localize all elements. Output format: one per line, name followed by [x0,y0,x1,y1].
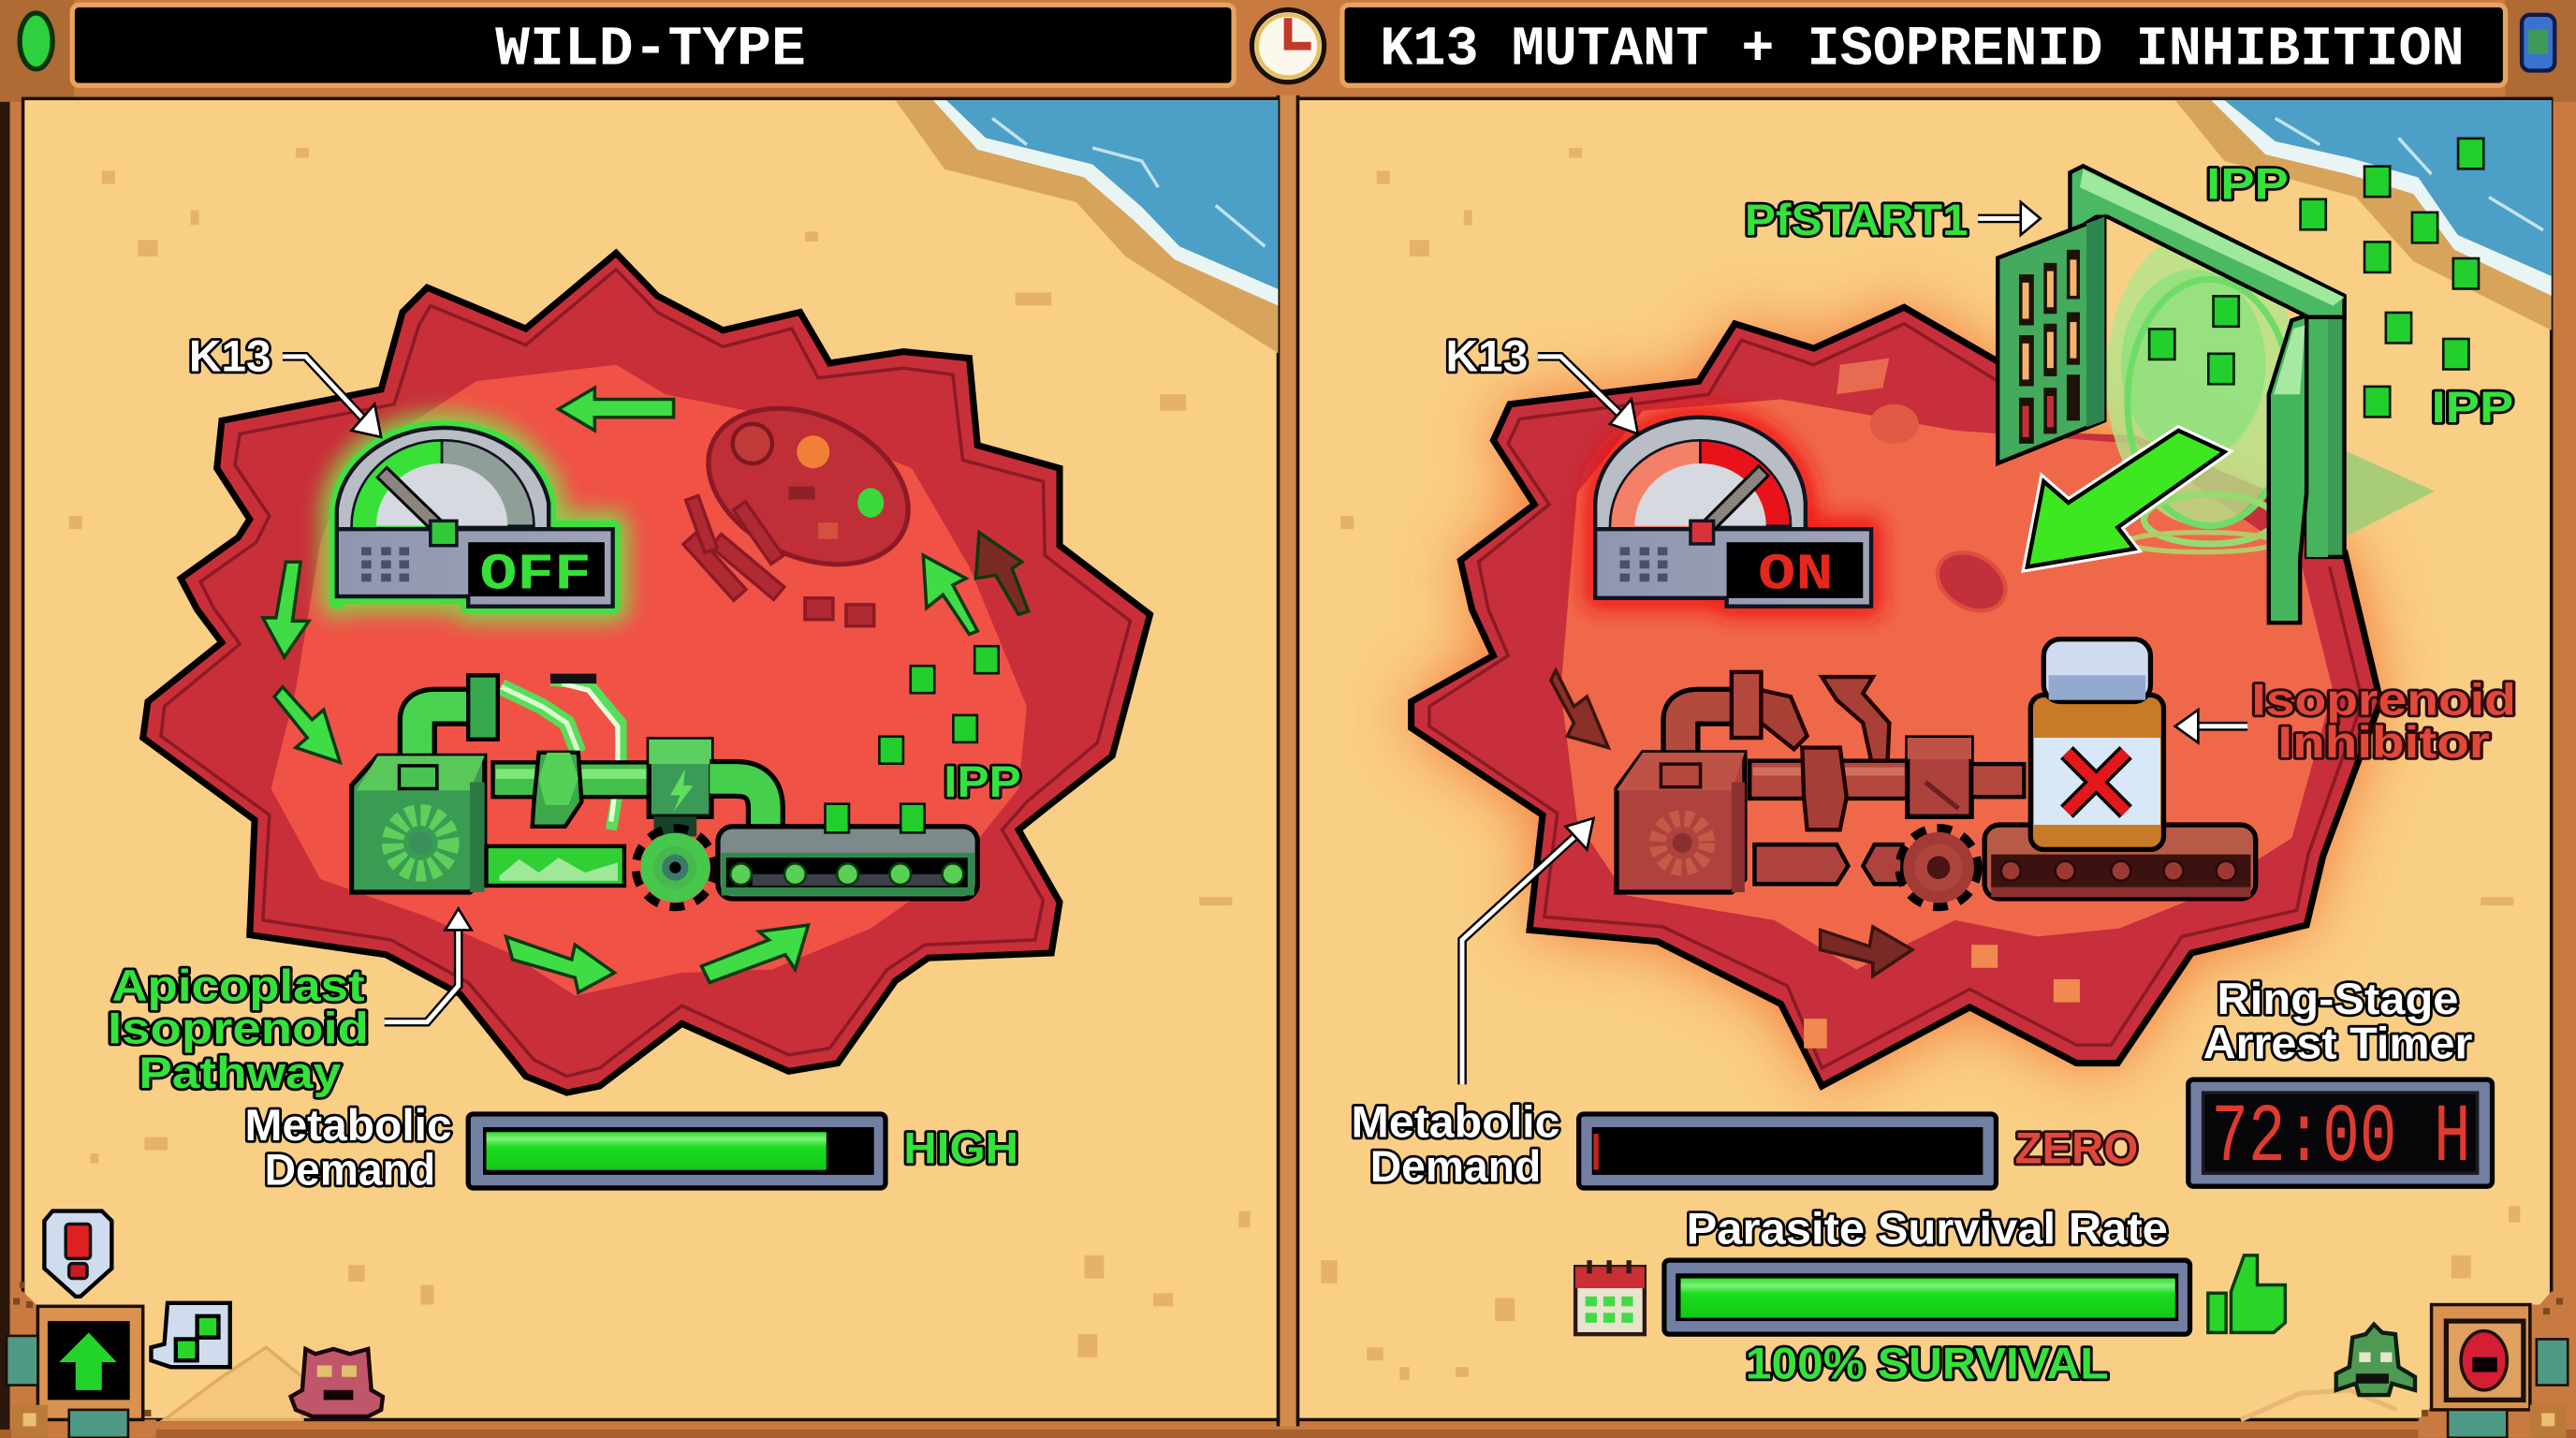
label 100% survival: 100% SURVIVAL [1746,1340,2109,1389]
label ring-stage arrest timer [2203,975,2472,1068]
rusted conveyor [1984,825,2256,899]
label IPP left: IPP [944,757,1021,807]
label isoprenoid inhibitor [2251,675,2516,768]
right elbow pipe [710,779,766,838]
label HIGH: HIGH [903,1124,1018,1174]
broken lower pipe [1754,844,1902,884]
sand specks left [69,148,1251,1357]
sand dune right [2241,1390,2397,1419]
icon: blue vial [2522,15,2554,70]
pathway arrows left [263,388,1029,992]
label metabolic demand right: Metabolic [1352,1098,1559,1148]
character: green monster [2336,1325,2415,1395]
door near post [2269,315,2306,623]
icon: chat bubble with nodes [151,1303,230,1367]
label parasite survival rate: Parasite Survival Rate [1687,1205,2168,1255]
bar: metabolic demand high [468,1114,886,1188]
bottle red X mark [2067,753,2126,812]
lower pipe with flow [487,846,624,886]
gauge: K13 off [337,428,613,607]
label apicoplast isoprenoid pathway: Apicoplast [111,961,365,1011]
cell blob left [143,253,1150,1093]
portal swirl [2106,230,2435,552]
sand dune left [165,1347,302,1419]
label metabolic demand right: Demand [1370,1142,1541,1192]
icon: calendar [1575,1260,1645,1334]
label metabolic demand right [1352,1098,1559,1192]
arrow: PfSTART1 to door [1978,202,2041,235]
rusted block left [1617,753,1745,892]
label IPP lower: IPP [2432,383,2513,433]
bar: metabolic demand zero [1579,1114,1996,1188]
icon: PfSTART1 door [1998,166,2345,623]
arrow: metabolic demand leader [1462,818,1593,1084]
label isoprenoid inhibitor: Inhibitor [2277,718,2490,768]
IPP squares right [2150,139,2482,416]
gauge: K13 on [1595,418,1871,607]
rusted upper pipe [1680,672,1908,829]
gauge readout on: ON [1758,547,1834,604]
label IPP upper: IPP [2206,159,2289,209]
label ZERO: ZERO [2015,1124,2138,1174]
icon: green gem [20,13,52,69]
shoreline right [2175,100,2552,330]
corner button: red creature [2419,1292,2568,1438]
machine: rusted broken pathway [1617,672,2256,907]
label apicoplast isoprenoid pathway [108,961,369,1098]
label metabolic demand left [245,1101,452,1195]
dark arrows right [1551,670,1912,976]
heat glow around cell [1412,307,2380,1086]
arrow: pathway leader [385,909,472,1022]
label metabolic demand left: Metabolic [245,1101,452,1151]
sand background right [1298,98,2552,1419]
timer display: 72:00 H [2211,1093,2471,1185]
label apicoplast isoprenoid pathway: Isoprenoid [108,1004,369,1053]
gear left [636,816,714,907]
bottle X core [2067,753,2126,812]
middle control block [649,740,711,816]
title wild-type: WILD-TYPE [495,17,806,81]
rusted pipe segment [1971,764,2024,797]
arrow: inhibitor to bottle [2175,710,2247,742]
IPP squares left [827,648,997,831]
door far post [2306,299,2345,557]
conveyor left [718,827,977,899]
organelle cluster left [683,378,933,626]
icon: thumbs up [2208,1255,2285,1332]
panel: K13 mutant [1298,98,2568,1438]
bar: parasite survival [1664,1260,2190,1334]
label metabolic demand left: Demand [265,1145,435,1195]
door frame top beam [2070,166,2345,317]
arrow: K13 to gauge left [283,357,381,437]
gauge readout off: OFF [479,547,592,604]
icon: inhibitor bottle [2030,639,2163,849]
arrow: big green influx [2027,431,2224,567]
title bar left [72,5,1234,85]
label apicoplast isoprenoid pathway: Pathway [139,1049,342,1098]
character: red monster [291,1349,383,1416]
rusted control block [1908,738,1971,816]
shoreline left [896,100,1278,353]
machine block left [352,756,485,892]
label ring-stage arrest timer: Ring-Stage [2217,975,2459,1024]
rusted gear [1899,829,1978,907]
sand background left [23,98,1278,1419]
panel: wild-type [7,98,1278,1438]
door open leaf [1998,217,2104,463]
title bar right [1342,5,2506,85]
timer display [2188,1079,2492,1186]
label PfSTART1: PfSTART1 [1745,196,1969,245]
icon: clock [1251,10,1325,82]
label isoprenoid inhibitor: Isoprenoid [2251,675,2516,725]
icon: alert bubble [44,1211,111,1297]
arrow: K13 to gauge right [1538,357,1638,433]
cell blob right [1412,307,2380,1086]
sand specks right [1321,148,2520,1380]
green upper pipe with lightning [417,674,651,829]
label K13 left: K13 [189,332,271,382]
label ring-stage arrest timer: Arrest Timer [2203,1019,2472,1068]
label K13 right: K13 [1445,332,1528,382]
machine: green isoprenoid pathway [352,674,977,907]
title k13 mutant: K13 MUTANT + ISOPRENID INHIBITION [1380,17,2465,81]
corner button: green up arrow [7,1282,156,1438]
